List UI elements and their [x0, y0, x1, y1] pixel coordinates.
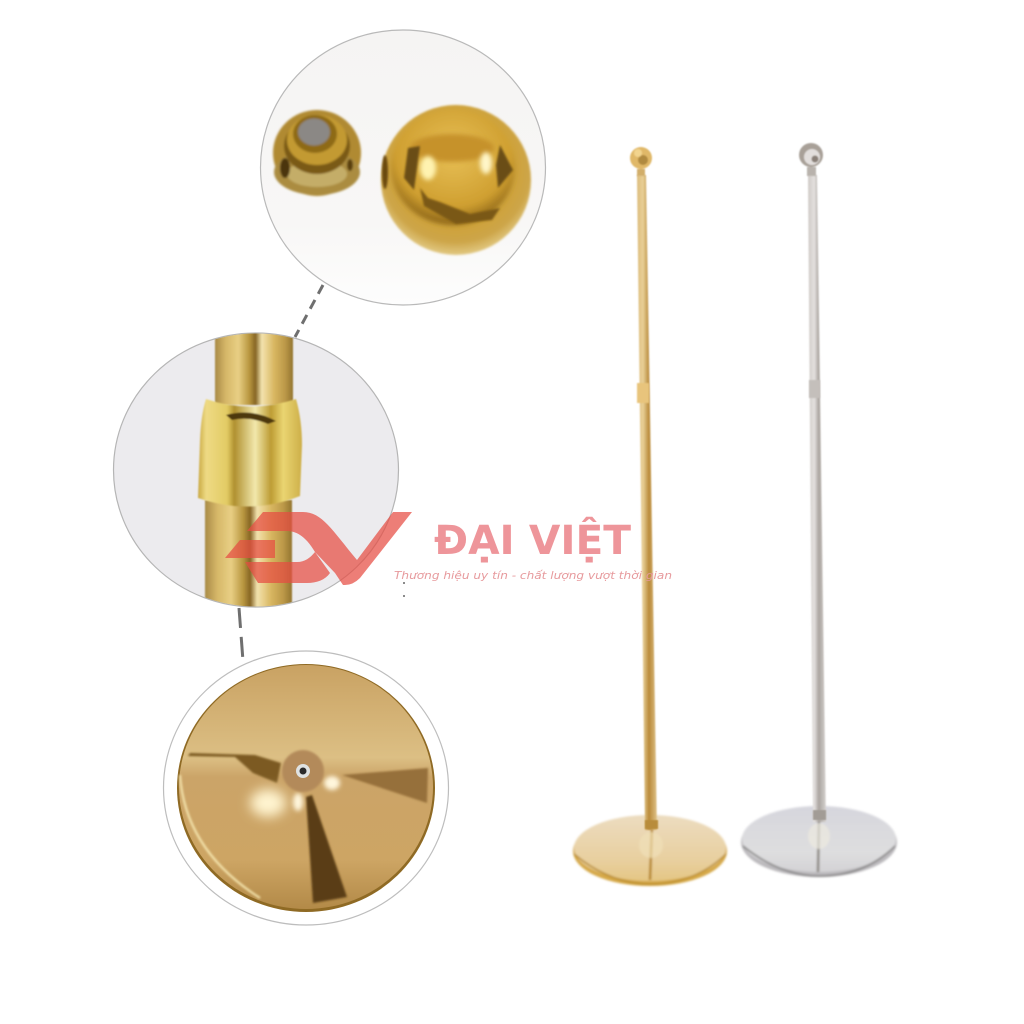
icon: gold ball finial: [630, 147, 652, 176]
icon: golden ball: [381, 105, 531, 255]
product: gold flag pole: [573, 147, 727, 886]
icon: silver ball finial: [799, 143, 823, 176]
icon: gold pole base: [573, 815, 727, 886]
product: silver flag pole: [741, 143, 897, 877]
panel: round base detail: [164, 651, 448, 925]
icon: finial socket cap: [273, 110, 361, 196]
brand name: ĐẠI VIỆT: [434, 516, 632, 564]
panel: ball finial detail: [260, 30, 546, 305]
icon: gold pole shaft: [637, 175, 657, 830]
connector: dashed line bottom: [239, 608, 243, 661]
icon: DV logo mark: [225, 512, 412, 585]
icon: silver pole base: [741, 806, 897, 877]
icon: lower pole tube: [205, 500, 292, 615]
icon: polished base disc: [177, 664, 435, 912]
icon: brass collar: [198, 399, 302, 507]
icon: silver pole shaft: [808, 175, 826, 822]
panel: pole joint detail: [114, 325, 398, 615]
connector: dashed line top: [295, 285, 323, 337]
specks near logo: [403, 582, 405, 597]
icon: center hub: [282, 750, 324, 792]
infographic canvas: [112, 29, 898, 926]
tagline: Thương hiệu uy tín - chất lượng vượt thời gian: [394, 569, 672, 582]
logo watermark: Đại Việt: [225, 512, 672, 585]
icon: upper pole tube: [215, 325, 293, 405]
